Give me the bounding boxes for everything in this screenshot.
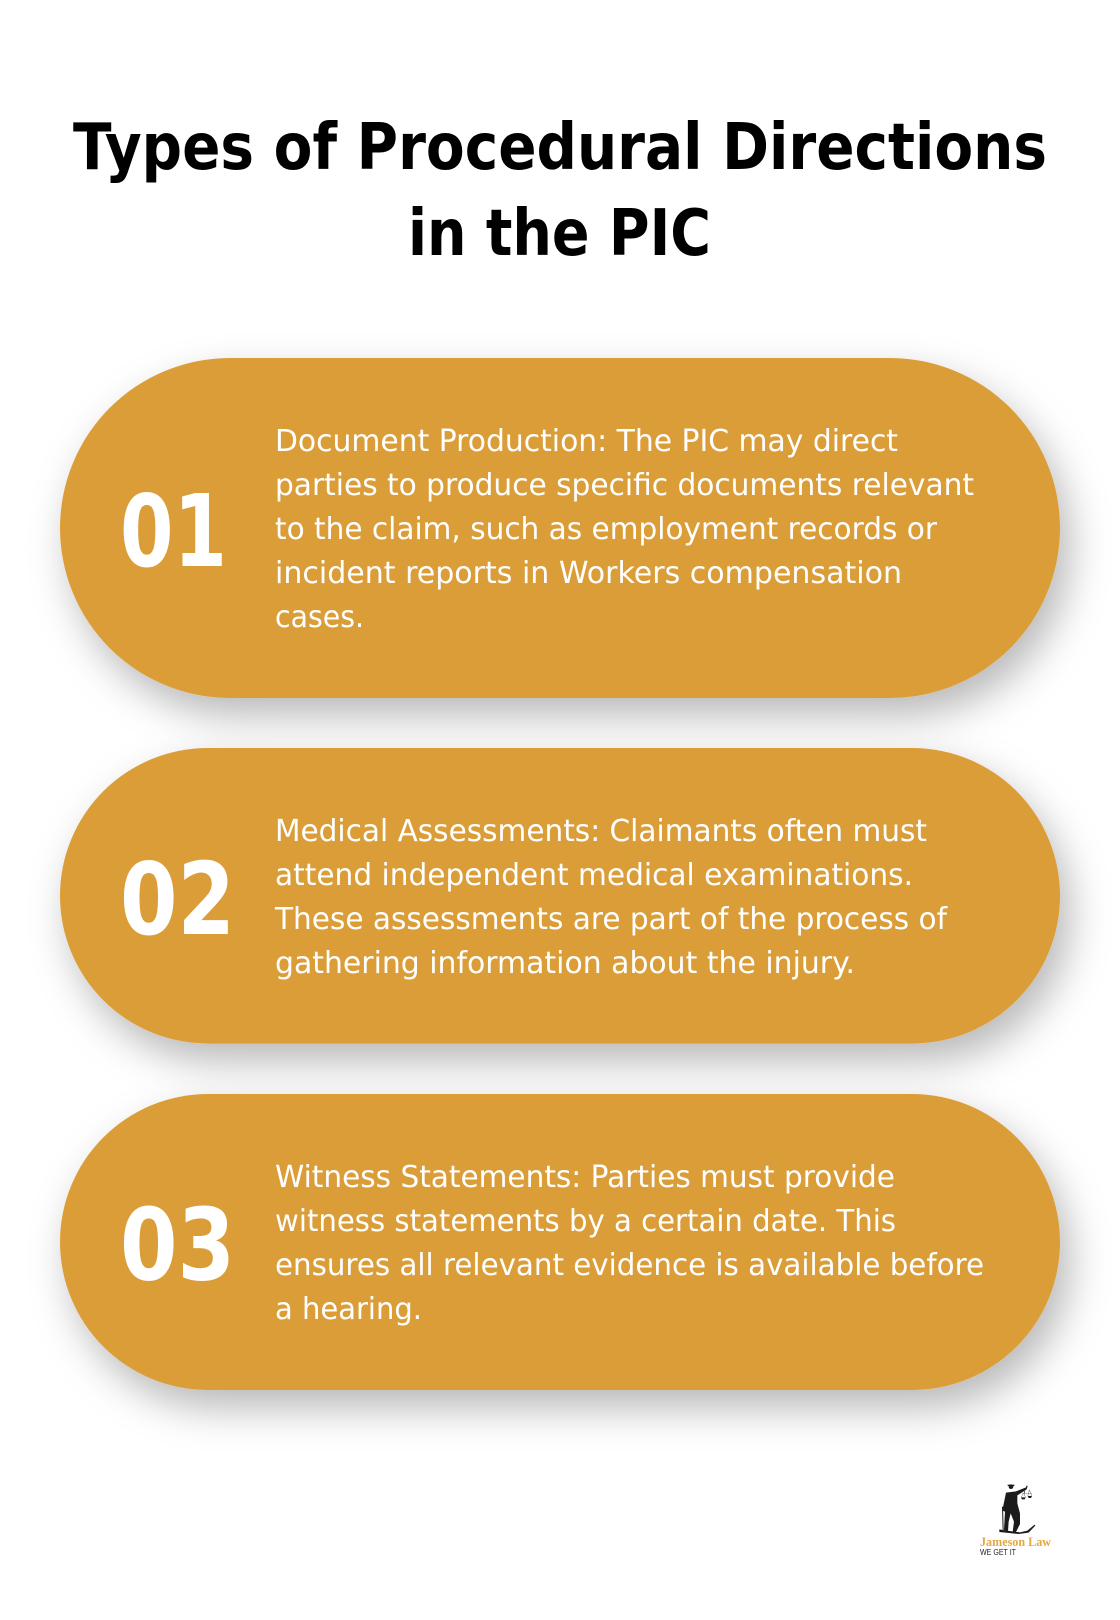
text block 03: ensures all relevant evidence is available before <box>275 1248 984 1283</box>
panel: step 02 medical assessments <box>60 748 1060 1044</box>
text block 01: to the claim, such as employment records or <box>275 512 938 547</box>
pill background 02 <box>60 748 1060 1044</box>
number 01: 01 <box>120 473 227 590</box>
text block 03: Witness Statements: Parties must provide <box>275 1160 895 1195</box>
text block 01: parties to produce specific documents relevant <box>275 468 974 503</box>
pill background 03 <box>60 1094 1060 1390</box>
text block 02 <box>274 814 948 981</box>
pill background 01 <box>60 358 1060 698</box>
text block 02: Medical Assessments: Claimants often must <box>275 814 927 849</box>
text block 02: These assessments are part of the process of <box>274 902 948 937</box>
text block 03: a hearing. <box>275 1292 422 1327</box>
logo name: Jameson Law <box>980 1534 1052 1549</box>
text block 02: gathering information about the injury. <box>275 946 855 981</box>
text block 01 <box>275 424 974 635</box>
text block 02: attend independent medical examinations. <box>275 858 913 893</box>
number 03: 03 <box>120 1186 235 1304</box>
text block 03 <box>275 1160 984 1327</box>
text block 01: Document Production: The PIC may direct <box>275 424 898 459</box>
text block 01: incident reports in Workers compensation <box>275 556 902 591</box>
title <box>73 111 1047 271</box>
icon: lady justice <box>999 1484 1035 1534</box>
title: in the PIC <box>408 197 711 271</box>
panel: step 03 witness statements <box>60 1094 1060 1390</box>
panel: step 01 document production <box>60 358 1060 698</box>
logo tagline: WE GET IT <box>980 1548 1016 1557</box>
logo: Jameson Law <box>980 1484 1052 1557</box>
text block 01: cases. <box>275 600 364 635</box>
number 02: 02 <box>120 841 235 958</box>
text block 03: witness statements by a certain date. This <box>275 1204 896 1239</box>
